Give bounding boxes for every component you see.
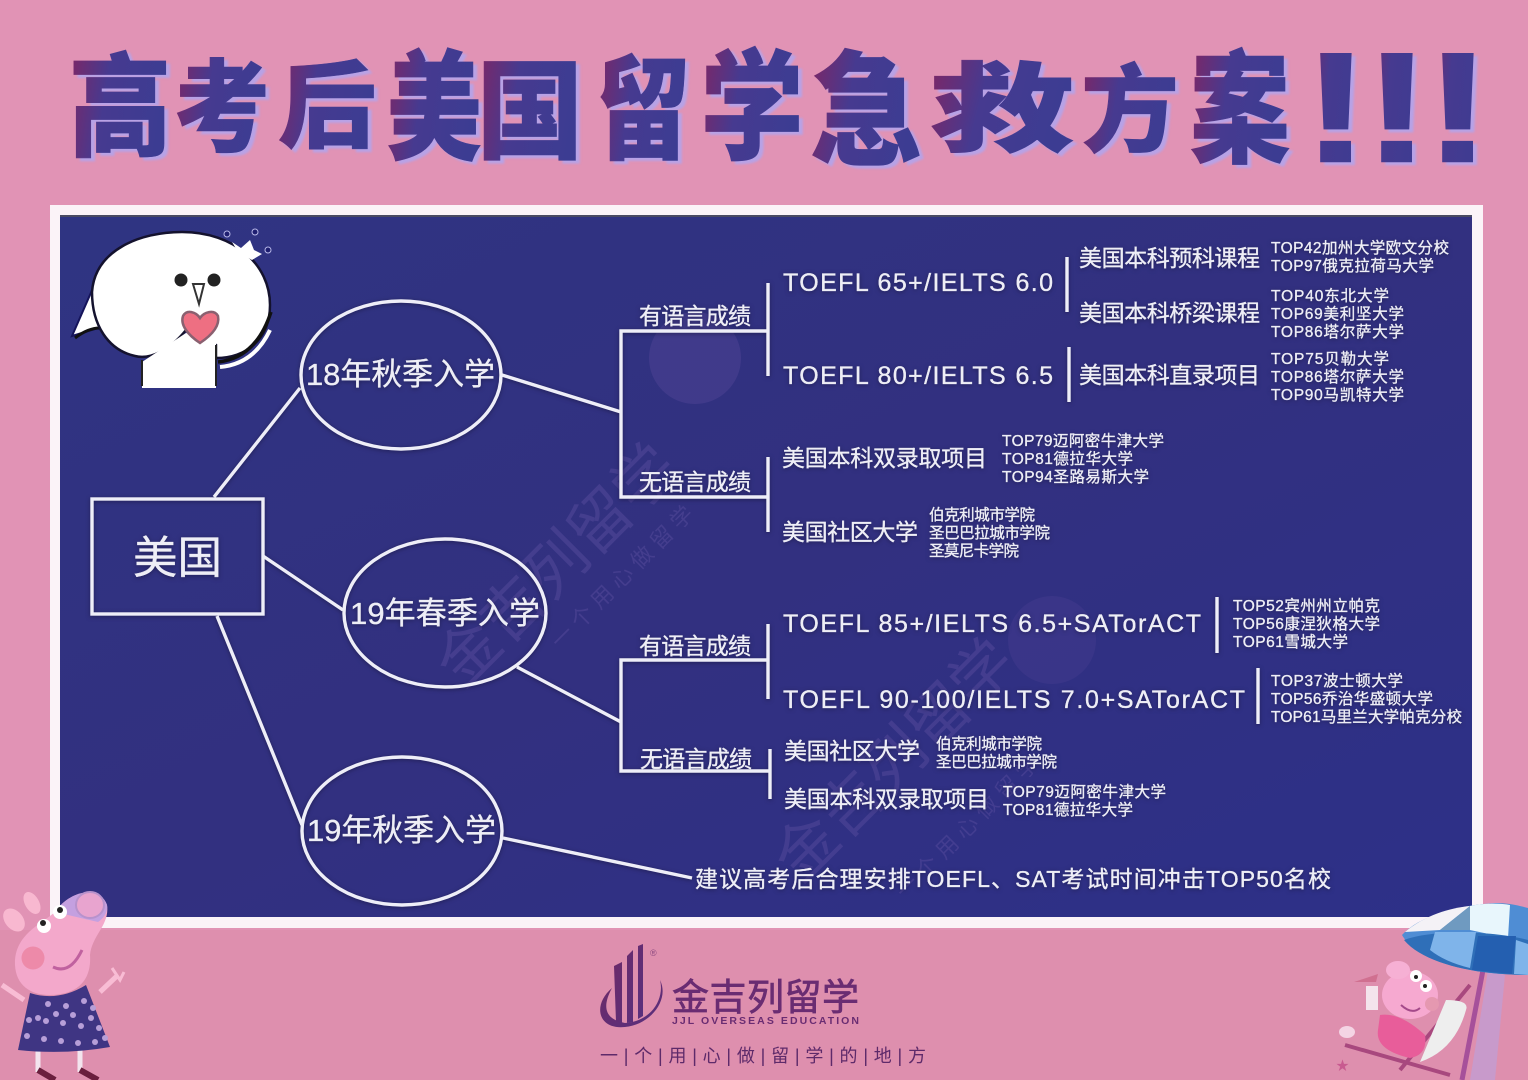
branch: 19年春季 无语言成绩: 美国本科双录取项目	[784, 786, 989, 812]
title: !	[1361, 19, 1433, 196]
branch: 19年春季 有语言成绩: TOP52宾州州立帕克	[1233, 597, 1380, 615]
title: 考	[174, 28, 270, 173]
branch: 18年秋季 有语言成绩	[639, 239, 1449, 404]
branch: 18年秋季 有语言成绩: 美国本科桥梁课程	[1079, 300, 1260, 326]
icon: Peppa Pig under beach umbrella	[1336, 903, 1528, 1080]
node: 18年秋季入学: 18年秋季入学	[306, 357, 495, 392]
branch: 19年春季 有语言成绩: TOP61马里兰大学帕克分校	[1271, 708, 1462, 726]
branch: 18年秋季 有语言成绩: TOP97俄克拉荷马大学	[1271, 257, 1434, 275]
branch: 19年春季 有语言成绩: TOEFL 90-100/IELTS 7.0+SATorACT	[783, 686, 1245, 714]
title: 高	[69, 17, 171, 179]
icon: Peppa Pig in polka-dot dress	[0, 889, 124, 1080]
branch: 18年秋季 有语言成绩: 有语言成绩	[639, 303, 751, 329]
branch: 19年春季 有语言成绩: TOP61雪城大学	[1233, 633, 1348, 651]
root box: 美国	[92, 499, 263, 614]
icon: logo towers: ®	[650, 948, 657, 958]
branch: 19年春季 无语言成绩: 圣巴巴拉城市学院	[936, 752, 1057, 771]
branch: 19年春季 有语言成绩: TOEFL 85+/IELTS 6.5+SATorACT	[783, 610, 1201, 638]
branch: 19年春季 无语言成绩: 伯克利城市学院	[936, 734, 1042, 753]
branch: 19年春季 无语言成绩: 美国社区大学	[784, 738, 920, 764]
branch: 18年秋季 有语言成绩: TOP75贝勒大学	[1271, 350, 1389, 368]
branch: 18年秋季 有语言成绩: TOP42加州大学欧文分校	[1271, 239, 1449, 257]
panel: white frame and navy board	[50, 205, 1483, 928]
branch: 19年春季 无语言成绩: TOP79迈阿密牛津大学	[1003, 783, 1166, 801]
title: 国	[476, 24, 584, 181]
branch: 18年秋季 无语言成绩: TOP79迈阿密牛津大学	[1002, 432, 1164, 450]
icon: white blob mascot with heart and crown	[72, 229, 271, 388]
branch: 18年秋季 有语言成绩: TOEFL 65+/IELTS 6.0	[783, 269, 1053, 297]
logo: 金吉列留学: 一|个|用|心|做|留|学|的|地|方	[600, 1046, 926, 1066]
branch: 18年秋季 有语言成绩: TOP86塔尔萨大学	[1271, 323, 1404, 341]
title: 美	[387, 13, 481, 184]
watermark: 一 个 用 心 做 留 学	[891, 751, 1043, 904]
branch: 18年秋季 无语言成绩: 伯克利城市学院	[929, 505, 1035, 524]
title: 方	[1081, 34, 1179, 172]
branch: 18年秋季 无语言成绩: TOP81德拉华大学	[1002, 450, 1133, 468]
branch: 18年秋季 有语言成绩: TOP90马凯特大学	[1271, 386, 1404, 404]
icon: Peppa Pig under beach umbrella: ★	[1336, 1058, 1349, 1073]
root box: 美国: 美国	[133, 534, 222, 583]
title: 学	[700, 12, 804, 185]
branch: 18年秋季 无语言成绩: 美国本科双录取项目	[782, 445, 987, 471]
title: 留	[596, 21, 690, 182]
branch: 19年春季 有语言成绩: TOP56康涅狄格大学	[1233, 615, 1380, 633]
branch: 18年秋季 有语言成绩: TOP86塔尔萨大学	[1271, 368, 1404, 386]
title: 后	[278, 30, 376, 168]
branch: 18年秋季 有语言成绩: 美国本科预科课程	[1079, 245, 1260, 271]
node: 19年秋季入学	[302, 757, 502, 905]
title: 案	[1190, 13, 1290, 189]
branch: 19年春季 无语言成绩	[640, 734, 1166, 819]
branch: 18年秋季 无语言成绩: 圣莫尼卡学院	[929, 541, 1019, 560]
branch: 18年秋季 有语言成绩: TOP69美利坚大学	[1271, 305, 1404, 323]
branch: 19年春季 有语言成绩	[639, 597, 1462, 726]
node: 19年春季入学: 19年春季入学	[350, 596, 540, 631]
node: 18年秋季入学	[301, 301, 501, 449]
branch: 18年秋季 无语言成绩: 美国社区大学	[782, 519, 918, 545]
watermark: 一 个 用 心 做 留 学	[546, 501, 698, 654]
title: 救	[930, 30, 1074, 173]
branch: 18年秋季 有语言成绩: TOP40东北大学	[1271, 287, 1389, 305]
text: 19年秋季 recommendation: 建议高考后合理安排TOEFL、SAT考试时间冲击TOP50名校	[695, 866, 1331, 892]
branch: 18年秋季 无语言成绩	[639, 432, 1164, 560]
branch: 19年春季 无语言成绩: TOP81德拉华大学	[1003, 801, 1133, 819]
watermark: 金吉列留学	[423, 432, 691, 700]
node: 19年秋季入学: 19年秋季入学	[307, 813, 496, 848]
branch: 19年春季 无语言成绩: 无语言成绩	[640, 746, 752, 772]
branch: 19年春季 有语言成绩: TOP37波士顿大学	[1271, 672, 1403, 690]
branch: 19年春季 有语言成绩: 有语言成绩	[639, 633, 751, 659]
title: !	[1300, 19, 1372, 196]
title: 急	[810, 12, 922, 192]
logo: 金吉列留学	[600, 944, 926, 1066]
branch: 18年秋季 有语言成绩: TOEFL 80+/IELTS 6.5	[783, 362, 1053, 390]
node: 19年春季入学	[344, 539, 546, 687]
logo: 金吉列留学: JJL OVERSEAS EDUCATION	[672, 1015, 859, 1027]
title	[69, 12, 1494, 196]
branch: 18年秋季 无语言成绩: 无语言成绩	[639, 469, 751, 495]
title: !	[1422, 19, 1494, 196]
watermark	[423, 312, 1096, 904]
branch: 19年春季 有语言成绩: TOP56乔治华盛顿大学	[1271, 690, 1433, 708]
branch: 18年秋季 无语言成绩: TOP94圣路易斯大学	[1002, 468, 1149, 486]
connector lines	[214, 257, 1258, 878]
logo: 金吉列留学: 金吉列留学	[672, 977, 859, 1018]
branch: 18年秋季 有语言成绩: 美国本科直录项目	[1079, 362, 1260, 388]
icon: logo towers	[600, 944, 663, 1027]
diagram: decision tree	[92, 239, 1462, 905]
branch: 18年秋季 无语言成绩: 圣巴巴拉城市学院	[929, 523, 1050, 542]
watermark: 金吉列留学	[761, 627, 1029, 895]
